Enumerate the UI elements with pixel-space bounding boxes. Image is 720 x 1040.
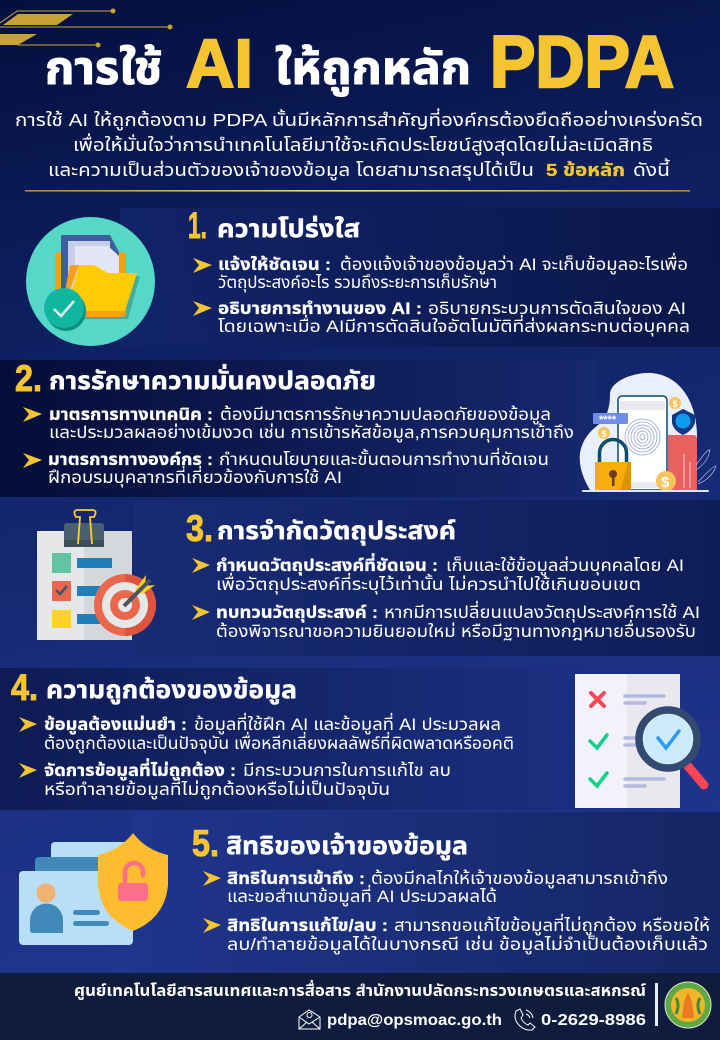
bullet 2a: ต้องมีมาตรการรักษาความปลอดภัยของข้อมูล xyxy=(220,404,551,426)
footer xyxy=(0,973,720,1040)
bullet 5a xyxy=(203,868,668,908)
email address: pdpa@opsmoac.go.th xyxy=(327,1012,502,1029)
heading: 1. xyxy=(188,205,207,246)
icon: phone fingerprint and padlock: $ xyxy=(661,474,670,491)
icon: phone fingerprint and padlock: $ xyxy=(602,429,607,439)
icon: phone fingerprint and padlock xyxy=(580,373,716,492)
heading: ความโปร่งใส xyxy=(217,215,360,243)
title xyxy=(45,22,674,103)
bullet 1a: วัตถุประสงค์อะไร รวมถึงระยะการเก็บรักษา xyxy=(218,273,497,293)
bullet 5b: สิทธิในการแก้ไข/ลบ : xyxy=(227,916,388,935)
bullet 3b: ต้องพิจารณาขอความยินยอมใหม่ หรือมีฐานทางกฎหมายอื่นรองรับ xyxy=(216,619,696,641)
ministry logo seal xyxy=(665,982,711,1028)
bullet 3b: หากมีการเปลี่ยนแปลงวัตถุประสงค์การใช้ AI xyxy=(384,600,700,623)
bullet 5b: สามารถขอแก้ไขข้อมูลที่ไม่ถูกต้อง หรือขอให้ xyxy=(394,913,710,937)
bullet 2a: มาตรการทางเทคนิค : xyxy=(49,405,213,424)
bullet 5a: ต้องมีกลไกให้เจ้าของข้อมูลสามารถเข้าถึง xyxy=(371,868,668,890)
bullet 4b: จัดการข้อมูลที่ไม่ถูกต้อง : xyxy=(44,758,236,781)
heading xyxy=(192,823,468,864)
bullet 4b: มีกระบวนการในการแก้ไข ลบ xyxy=(243,760,451,780)
heading xyxy=(188,205,360,246)
footer divider xyxy=(655,983,658,1026)
panel: section 2 security xyxy=(0,358,716,497)
bullet 2a xyxy=(23,404,574,444)
bullet 1a: ต้องแจ้งเจ้าของข้อมูลว่า AI จะเก็บข้อมูลอะไรเพื่อ xyxy=(340,252,688,276)
panel: section 3 purpose limitation xyxy=(37,500,720,656)
bullet 5b: ลบ/ทำลายข้อมูลได้ในบางกรณี เช่น ข้อมูลไม่จำเป็นต้องเก็บแล้ว xyxy=(227,934,708,956)
panel: section 5 data subject rights xyxy=(19,812,720,973)
bullet 2a: และประมวลผลอย่างเข้มงวด เช่น การเข้ารหัสข้อมูล,การควบคุมการเข้าถึง xyxy=(49,422,574,444)
bullet 1a: แจ้งให้ชัดเจน : xyxy=(218,255,331,274)
icon: id cards with shield xyxy=(19,833,168,945)
heading xyxy=(186,508,456,549)
panel: section 4 accuracy xyxy=(0,667,704,810)
title: PDPA xyxy=(490,22,674,103)
bullet 3b: ทบทวนวัตถุประสงค์ : xyxy=(216,603,378,623)
title: AI xyxy=(186,25,253,102)
bullet 4a xyxy=(19,712,514,755)
decorative gold circuit lines xyxy=(0,8,172,48)
bullet 4b xyxy=(19,758,451,801)
bullet 3a: เพื่อวัตถุประสงค์ที่ระบุไว้เท่านั้น ไม่ควรนำไปใช้เกินขอบเขต xyxy=(216,572,641,595)
bullet 4b: หรือทำลายข้อมูลที่ไม่ถูกต้องหรือไม่เป็นปัจจุบัน xyxy=(44,777,390,801)
bullet 1b: อธิบายการทำงานของ AI : xyxy=(218,299,422,318)
heading: 3. xyxy=(186,508,213,549)
icon: document with magnifier xyxy=(575,674,704,808)
icon: folder with check xyxy=(26,217,155,346)
intro text: และความเป็นส่วนตัวของเจ้าของข้อมูล โดยสามารถสรุปได้เป็น xyxy=(48,160,534,182)
bullet 3a xyxy=(192,553,684,595)
bullet 1b: อธิบายกระบวนการตัดสินใจของ AI xyxy=(428,299,686,318)
bullet 5a: สิทธิในการเข้าถึง : xyxy=(227,869,365,888)
footer organisation name: ศูนย์เทคโนโลยีสารสนเทศและการสื่อสาร สำนักงานปลัดกระทรวงเกษตรและสหกรณ์ xyxy=(74,979,646,1001)
intro text: ดังนี้ xyxy=(633,158,670,180)
heading: 4. xyxy=(11,667,38,708)
bullet 2b: มาตรการทางองค์กร : xyxy=(48,450,213,469)
title: ให้ถูกหลัก xyxy=(275,42,471,96)
heading: 5. xyxy=(192,823,219,864)
intro text: การใช้ AI ให้ถูกต้องตาม PDPA นั้นมีหลักการสำคัญที่องค์กรต้องยึดถืออย่างเคร่งครัด xyxy=(15,108,703,132)
heading: การรักษาความมั่นคงปลอดภัย xyxy=(49,364,376,395)
bullet 4a: ต้องถูกต้องและเป็นปัจจุบัน เพื่อหลีกเลี่ยงผลลัพธ์ที่ผิดพลาดหรืออคติ xyxy=(44,731,514,755)
icon: telephone xyxy=(515,1009,535,1030)
bullet 3a: เก็บและใช้ข้อมูลส่วนบุคคลโดย AI xyxy=(446,555,684,577)
bullet 3a: กำหนดวัตถุประสงค์ที่ชัดเจน : xyxy=(216,553,438,576)
intro text: 5 ข้อหลัก xyxy=(546,160,625,180)
bullet 1b: โดยเฉพาะเมื่อ AIมีการตัดสินใจอัตโนมัติที่ส่งผลกระทบต่อบุคคล xyxy=(218,314,690,337)
divider xyxy=(25,190,690,192)
heading: 2. xyxy=(15,358,42,399)
bullet 3b xyxy=(192,600,700,641)
heading xyxy=(15,358,376,399)
bullet 2b: ฝึกอบรมบุคลากรที่เกี่ยวข้องกับการใช้ AI xyxy=(48,465,342,488)
heading: การจำกัดวัตถุประสงค์ xyxy=(217,517,456,546)
icon: clipboard and target xyxy=(37,510,156,640)
bullet 1b xyxy=(193,299,690,337)
phone number: 0-2629-8986 xyxy=(541,1012,646,1029)
bullet 2b: กำหนดนโยบายและขั้นตอนการทำงานที่ชัดเจน xyxy=(219,447,549,469)
bullet 4a: ข้อมูลต้องแม่นยำ : xyxy=(44,714,187,735)
bullet 2b xyxy=(23,447,549,488)
intro text xyxy=(15,108,703,182)
title: การใช้ xyxy=(45,42,162,94)
icon: phone fingerprint and padlock: $ xyxy=(672,399,678,409)
heading: ความถูกต้องของข้อมูล xyxy=(46,676,297,705)
icon: phone fingerprint and padlock: **** xyxy=(599,414,617,426)
bullet 5a: และขอสำเนาข้อมูลที่ AI ประมวลผลได้ xyxy=(227,884,497,908)
bullet 5b xyxy=(203,913,710,956)
icon: email envelope xyxy=(299,1010,320,1029)
bullet 4a: ข้อมูลที่ใช้ฝึก AI และข้อมูลที่ AI ประมวลผล xyxy=(194,712,501,736)
heading: สิทธิของเจ้าของข้อมูล xyxy=(226,832,468,861)
bullet 1a xyxy=(193,252,688,293)
panel: section 1 transparency xyxy=(26,205,720,347)
heading xyxy=(11,667,297,708)
intro text: เพื่อให้มั่นใจว่าการนำเทคโนโลยีมาใช้จะเกิดประโยชน์สูงสุดโดยไม่ละเมิดสิทธิ xyxy=(73,133,653,157)
